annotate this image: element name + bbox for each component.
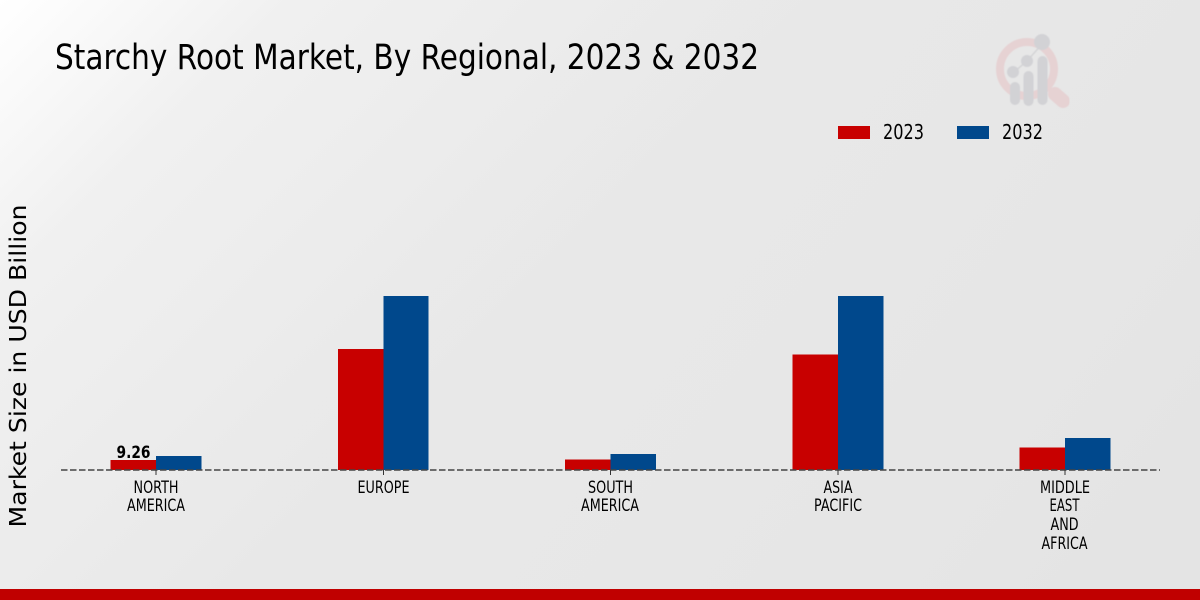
x label: Middle East and Africa: MIDDLE <box>1040 478 1090 498</box>
legend item: 2032: 2032 <box>1002 120 1043 144</box>
x label: Europe: EUROPE <box>358 478 410 498</box>
x label: Middle East and Africa: EAST <box>1050 496 1080 516</box>
x label: Middle East and Africa: AND <box>1050 515 1078 535</box>
x label: North America: AMERICA <box>127 496 185 516</box>
data label: 9.26: 9.26 <box>116 443 150 463</box>
x label: North America: NORTH <box>134 478 178 498</box>
footer bar <box>0 589 1200 600</box>
x label: South America <box>581 478 639 516</box>
y axis title: Market Size in USD Billion <box>6 204 32 528</box>
legend <box>838 120 1043 144</box>
x label: Asia Pacific: PACIFIC <box>814 496 862 516</box>
bars: Asia Pacific <box>792 296 884 470</box>
legend item: 2023 <box>838 120 924 144</box>
x axis baseline <box>61 469 1160 471</box>
x label: South America: SOUTH <box>588 478 633 498</box>
x label: Middle East and Africa: AFRICA <box>1042 534 1088 554</box>
bars: South America <box>565 454 656 470</box>
x label: Middle East and Africa <box>1040 478 1090 554</box>
bars: Europe <box>338 296 428 470</box>
x label: South America: AMERICA <box>581 496 639 516</box>
x label: Asia Pacific <box>814 478 862 516</box>
title: Starchy Root Market, By Regional, 2023 & 2032 <box>55 38 759 78</box>
x label: Asia Pacific: ASIA <box>824 478 853 498</box>
legend item: 2023: 2023 <box>883 120 924 144</box>
bar chart <box>61 296 1160 554</box>
x label: North America <box>127 478 185 516</box>
bars: Middle East and Africa <box>1020 438 1110 470</box>
icon: watermark logo <box>1000 34 1063 106</box>
bars: North America <box>110 456 202 470</box>
legend item: 2032 <box>957 120 1043 144</box>
